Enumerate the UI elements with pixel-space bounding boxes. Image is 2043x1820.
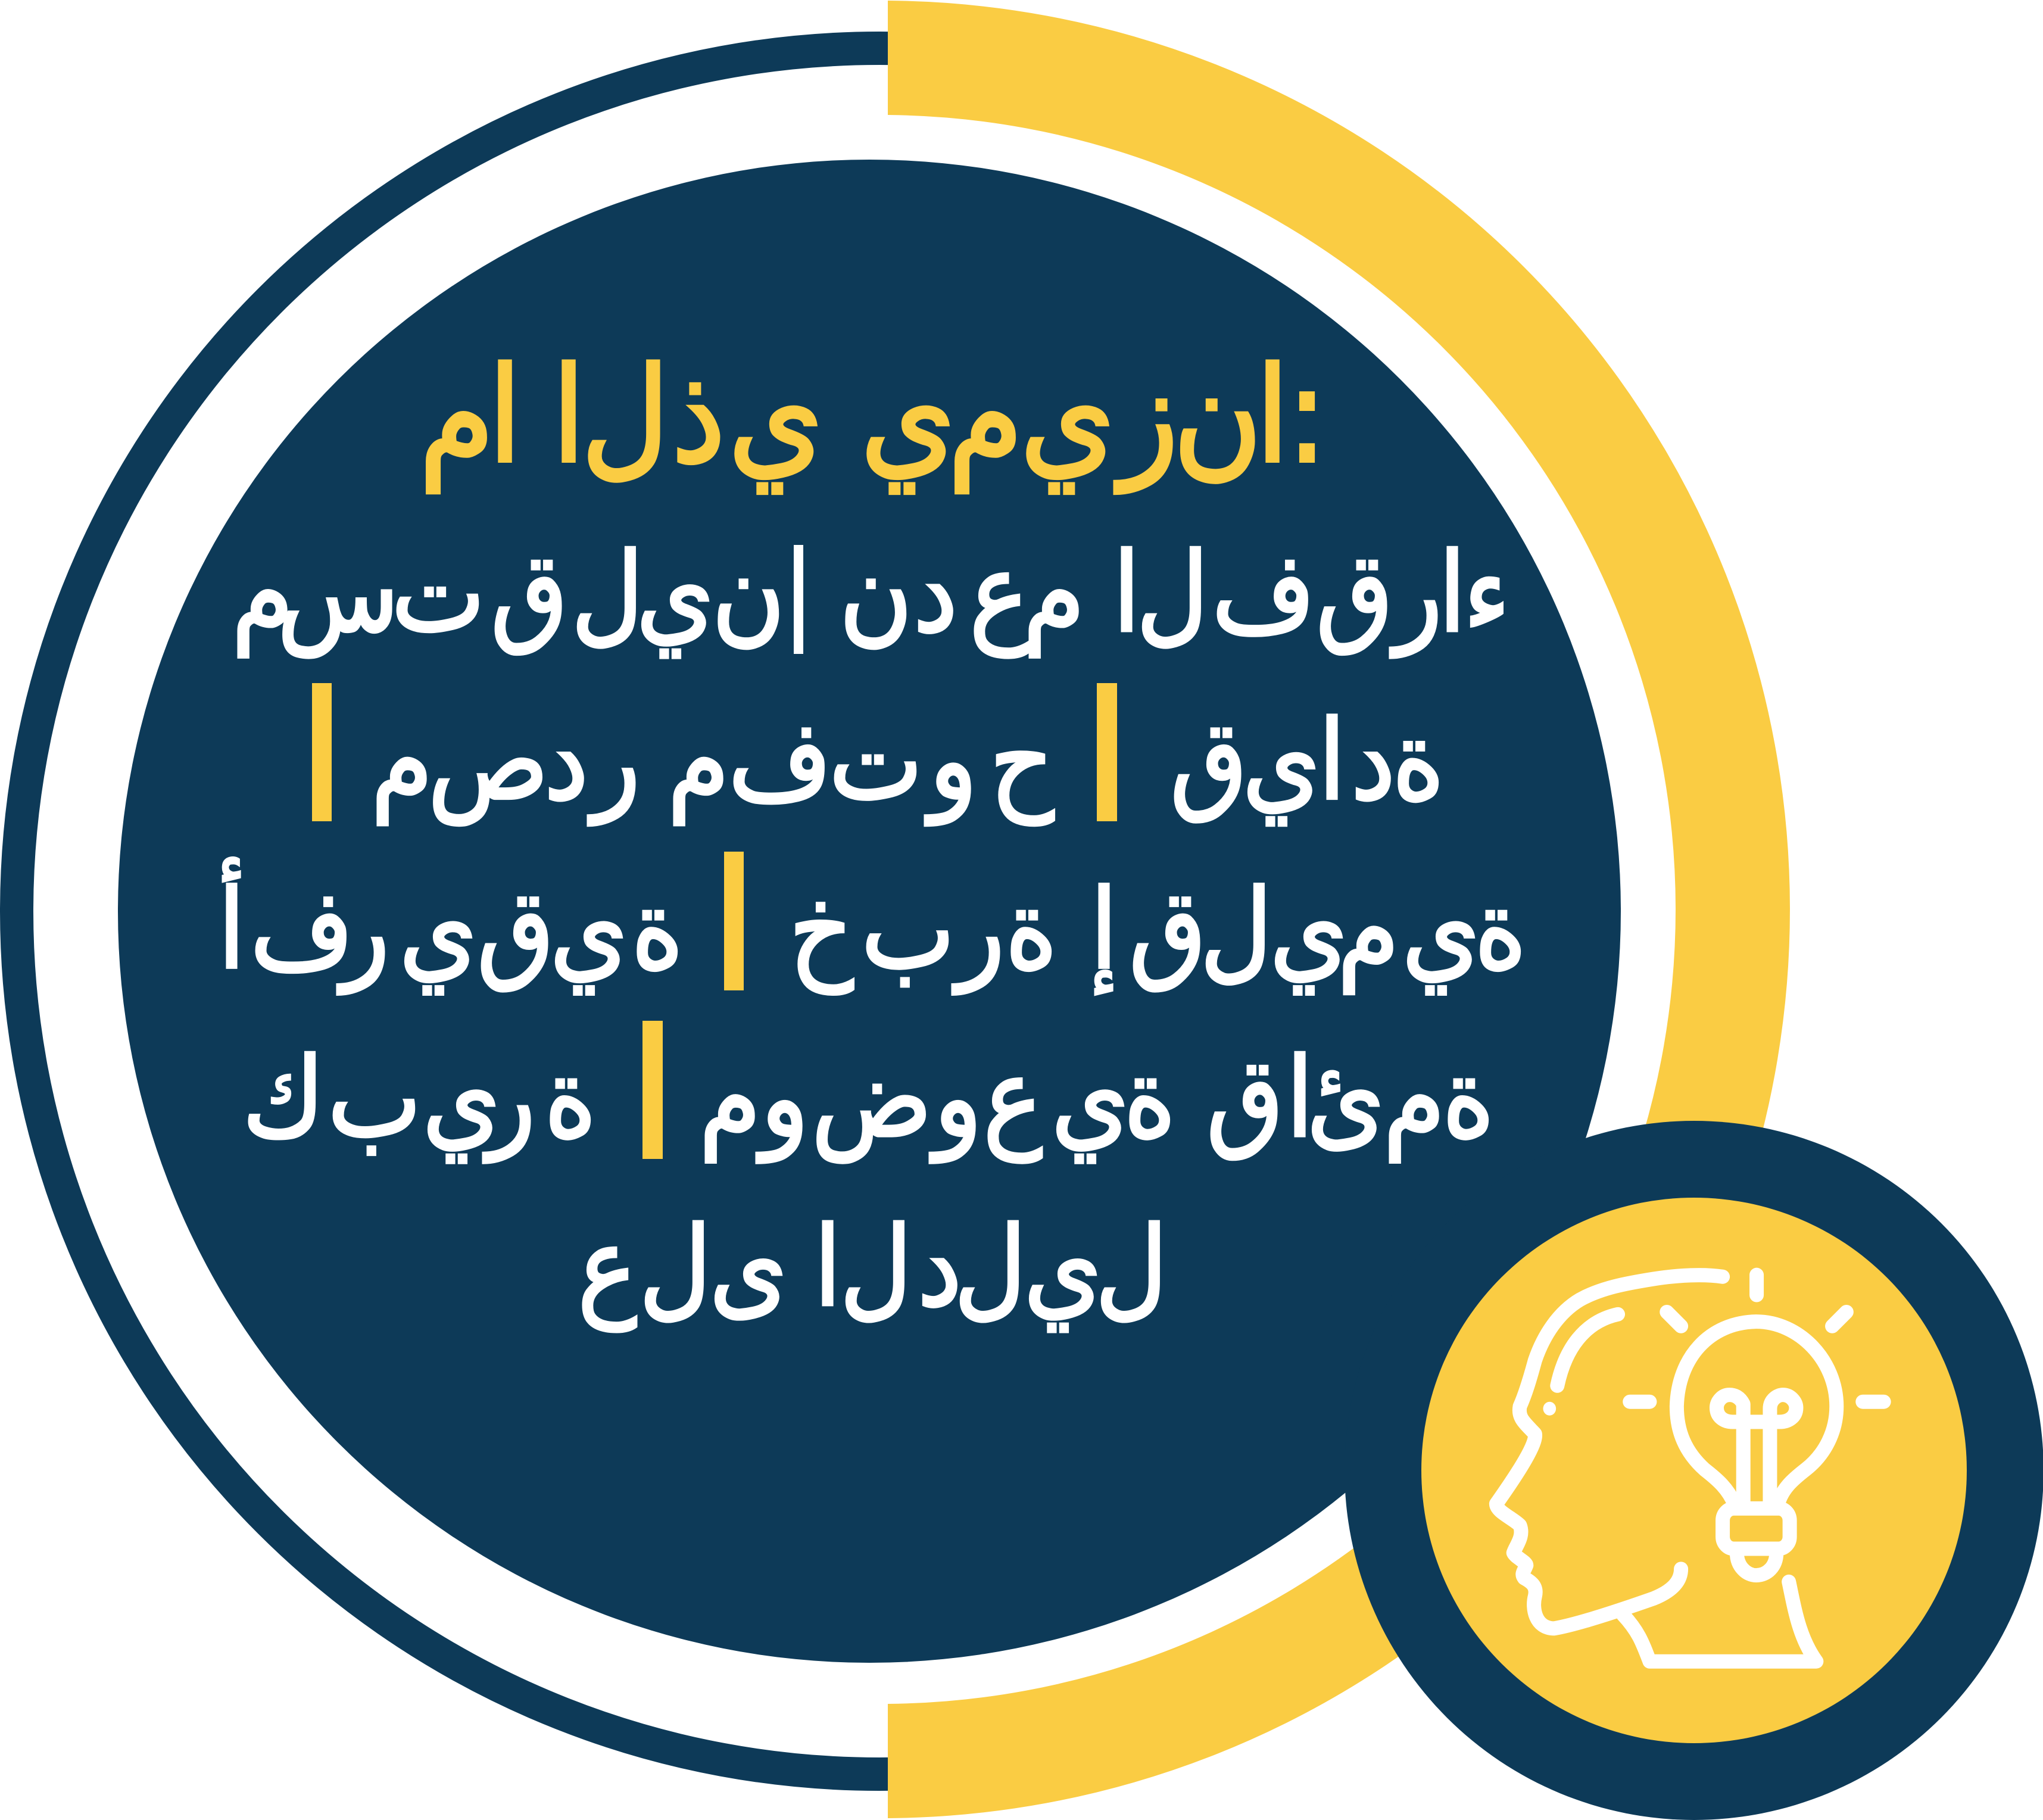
yellow separator bar xyxy=(312,683,332,821)
filament xyxy=(1717,1395,1796,1505)
forehead line xyxy=(1557,1314,1618,1386)
rays xyxy=(1630,1275,1884,1402)
white separator bar xyxy=(794,545,803,654)
bulb xyxy=(1677,1322,1836,1505)
head outline xyxy=(1496,1275,1723,1628)
text line 3: مصدر مفتوح xyxy=(371,696,1054,826)
text line 2 xyxy=(232,529,1510,657)
text line 2: مستقلين xyxy=(232,529,785,657)
eye xyxy=(1543,1402,1556,1416)
text line 4: خبرة إقليمية xyxy=(789,865,1527,995)
text line 4: أفريقية xyxy=(218,858,684,995)
text line 2: ندعم الفقراء xyxy=(839,529,1510,657)
navy half ring xyxy=(0,32,888,1791)
title: ما الذي يميزنا: xyxy=(419,339,1328,493)
yellow half ring xyxy=(888,1,1790,1818)
text line 4 xyxy=(218,852,1527,995)
yellow separator bar xyxy=(724,852,744,990)
badge yellow circle xyxy=(1421,1198,1967,1743)
yellow separator bar xyxy=(1097,683,1117,821)
main navy disc xyxy=(118,160,1621,1663)
text line 5: موضوعية قائمة xyxy=(699,1034,1495,1163)
text line 3 xyxy=(312,683,1445,826)
neck xyxy=(1623,1582,1816,1662)
base xyxy=(1723,1509,1790,1549)
text line 3: قيادة xyxy=(1170,696,1445,825)
icon: head with light bulb xyxy=(1496,1275,1884,1662)
bulb tip xyxy=(1737,1553,1776,1575)
text line 5 xyxy=(242,1021,1495,1163)
text line 6: على الدليل xyxy=(578,1203,1168,1332)
text line 5: كبيرة xyxy=(242,1034,597,1163)
badge navy circle xyxy=(1345,1121,2043,1820)
yellow separator bar xyxy=(642,1021,663,1159)
